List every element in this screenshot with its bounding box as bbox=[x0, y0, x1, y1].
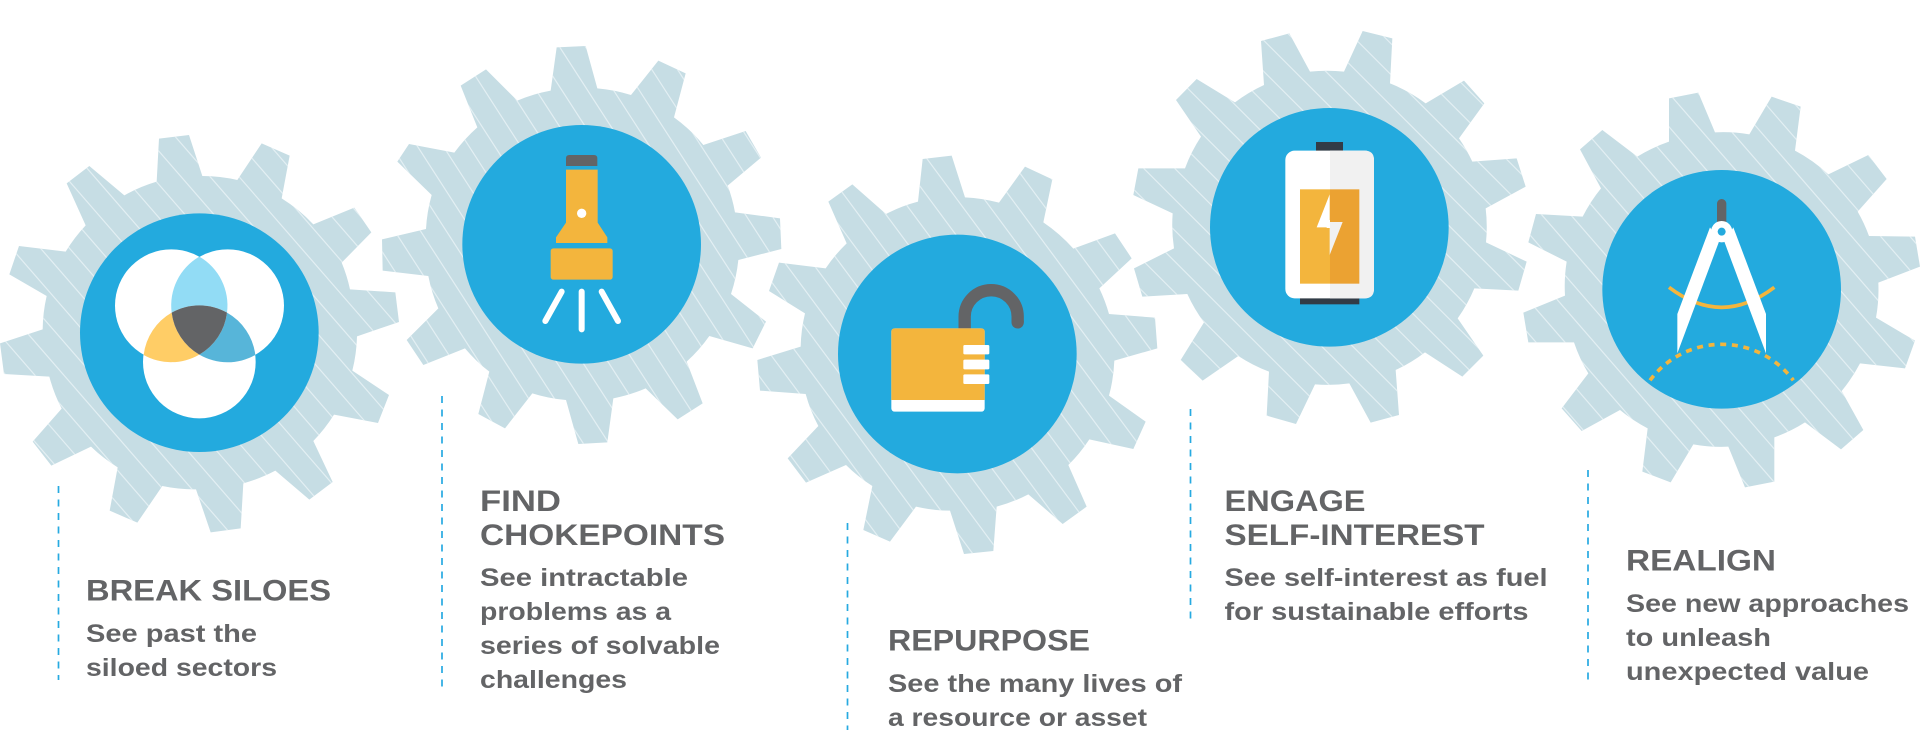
gear shape bbox=[382, 46, 781, 444]
text block: realign bbox=[1588, 470, 1909, 686]
text block: break siloes bbox=[58, 486, 331, 682]
description: repurpose: a resource or asset bbox=[888, 704, 1148, 732]
text block: find chokepoints bbox=[442, 396, 725, 694]
gear shape bbox=[1523, 93, 1920, 487]
gear: break siloes bbox=[0, 133, 400, 533]
heading: engage self-interest: SELF-INTEREST bbox=[1224, 519, 1484, 552]
text block: repurpose bbox=[848, 523, 1183, 732]
description: engage self-interest: See self-interest as fuel bbox=[1224, 564, 1548, 592]
description: find chokepoints: challenges bbox=[480, 666, 627, 694]
description: engage self-interest bbox=[1224, 564, 1548, 626]
gear shape bbox=[757, 156, 1157, 554]
text block: engage self-interest bbox=[1190, 409, 1548, 626]
gear shape bbox=[1133, 31, 1527, 424]
icon: flashlight bbox=[545, 155, 618, 329]
heading: engage self-interest bbox=[1224, 485, 1484, 552]
blue hub circle bbox=[80, 213, 319, 452]
description: realign bbox=[1626, 590, 1909, 686]
icon: venn diagram bbox=[115, 249, 284, 418]
heading: find chokepoints: FIND bbox=[480, 485, 561, 518]
blue hub circle bbox=[1602, 170, 1841, 409]
description: find chokepoints bbox=[480, 564, 720, 694]
blue hub circle bbox=[1210, 108, 1449, 347]
blue hub circle bbox=[838, 235, 1077, 473]
description: find chokepoints: problems as a bbox=[480, 598, 672, 626]
description: break siloes: See past the bbox=[86, 620, 257, 648]
icon: open padlock bbox=[891, 290, 1024, 412]
gear: find chokepoints bbox=[382, 46, 781, 444]
heading: engage self-interest: ENGAGE bbox=[1224, 485, 1366, 518]
icon: drawing compass bbox=[1650, 199, 1793, 380]
description: find chokepoints: series of solvable bbox=[480, 632, 720, 660]
heading: repurpose: REPURPOSE bbox=[888, 624, 1090, 658]
description: find chokepoints: See intractable bbox=[480, 564, 688, 592]
gear: realign bbox=[1523, 93, 1920, 487]
description: realign: unexpected value bbox=[1626, 658, 1869, 686]
gear: repurpose bbox=[757, 156, 1157, 554]
heading: find chokepoints: CHOKEPOINTS bbox=[480, 519, 725, 552]
icon: battery bbox=[1285, 142, 1374, 304]
description: realign: to unleash bbox=[1626, 624, 1771, 652]
blue hub circle bbox=[462, 125, 701, 364]
heading: realign: REALIGN bbox=[1626, 544, 1776, 578]
description: repurpose bbox=[888, 670, 1183, 732]
description: engage self-interest: for sustainable efforts bbox=[1224, 598, 1528, 626]
description: break siloes: siloed sectors bbox=[86, 654, 277, 682]
heading: find chokepoints bbox=[480, 485, 725, 552]
description: break siloes bbox=[86, 620, 277, 682]
gear shape bbox=[0, 135, 399, 532]
gear: engage self-interest bbox=[1133, 31, 1527, 424]
description: realign: See new approaches bbox=[1626, 590, 1909, 618]
heading: break siloes: BREAK SILOES bbox=[86, 574, 331, 608]
description: repurpose: See the many lives of bbox=[888, 670, 1183, 698]
